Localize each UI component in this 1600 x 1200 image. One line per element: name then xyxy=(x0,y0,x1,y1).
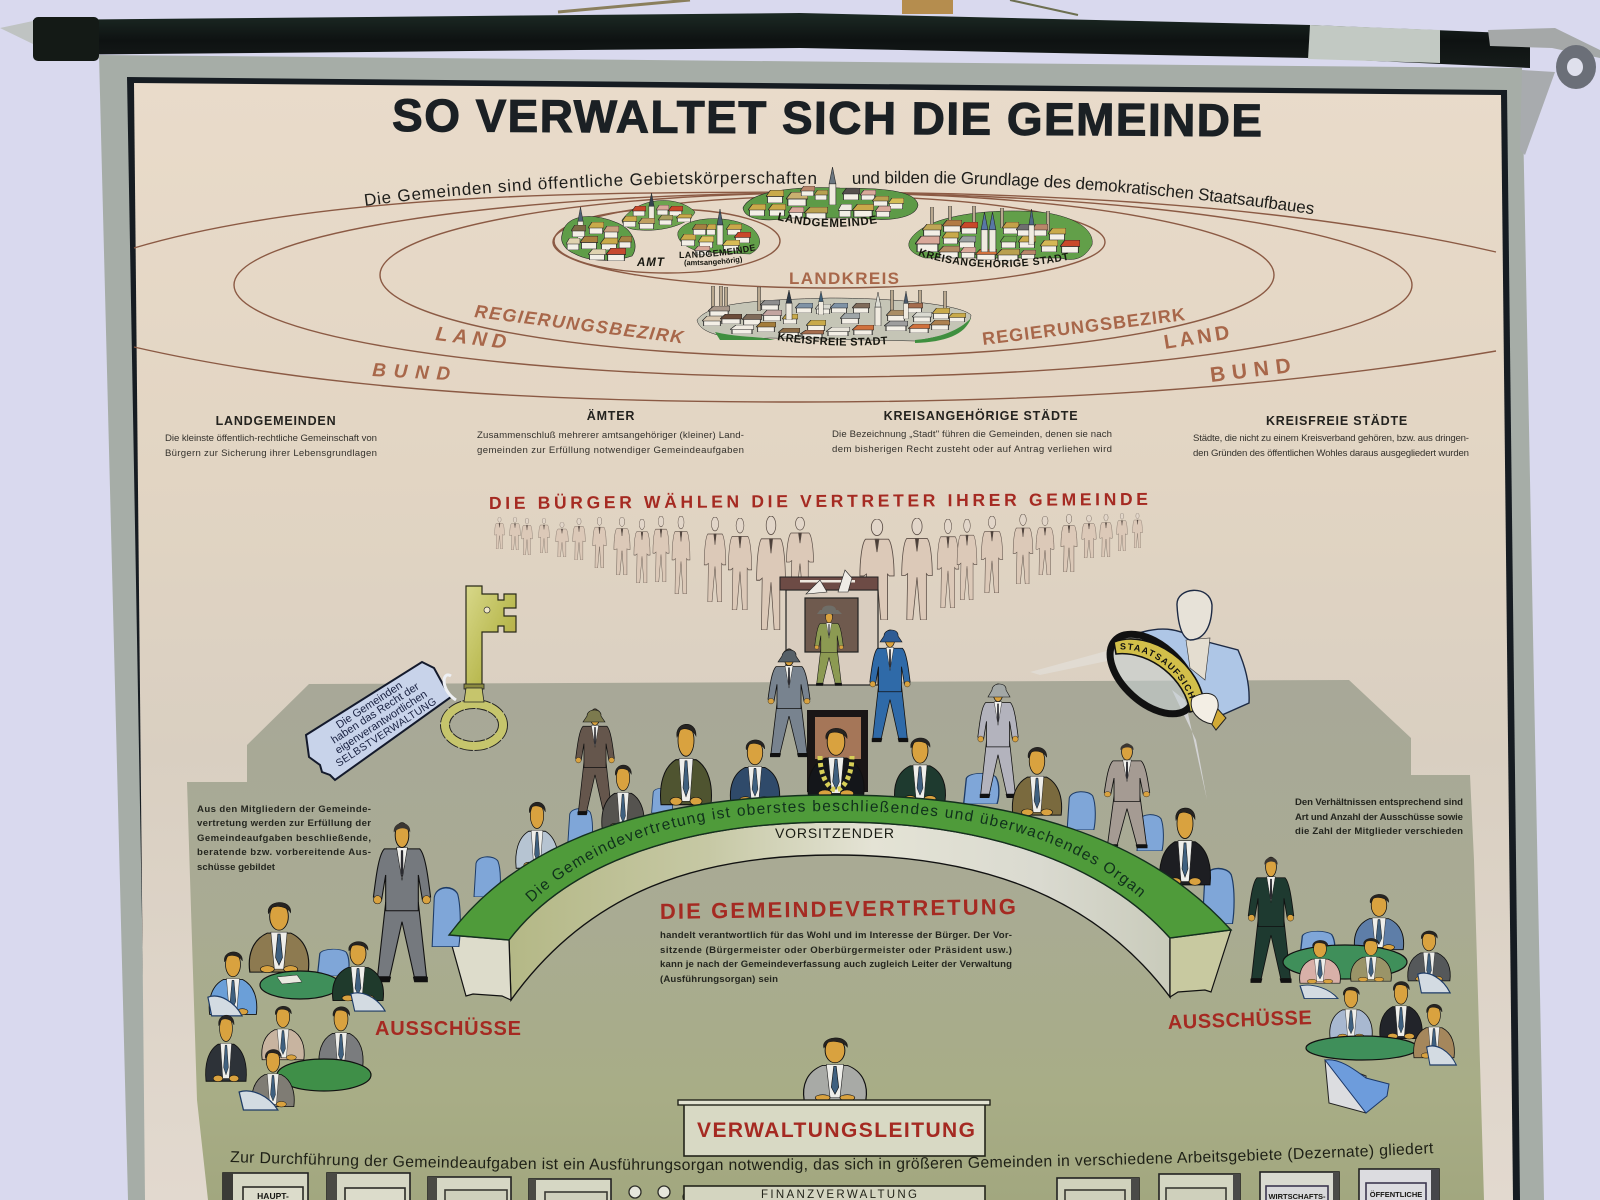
tag: Selbstverwaltung xyxy=(306,662,456,780)
text block: Ämter xyxy=(477,408,744,456)
text block: Kreisfreie Städte: KREISFREIE STÄDTE xyxy=(1266,413,1408,428)
text block: council description xyxy=(660,930,1012,985)
text block: council description: sitzende (Bürgermeister oder Oberbürgermeister oder Präsident usw.) xyxy=(660,945,1012,956)
text block: right note on committees xyxy=(1295,797,1463,837)
text block: Ämter: ÄMTER xyxy=(587,408,635,423)
town labels: AMT xyxy=(636,257,665,269)
labels: administrative levels: BUND xyxy=(1209,354,1292,387)
town labels: KREISFREIE STADT xyxy=(778,332,888,346)
text block: council description: kann je nach der Gemeindeverfassung auch zugleich Leiter der Verwaltung xyxy=(660,959,1012,970)
text block: Kreisangehörige Städte xyxy=(832,408,1112,455)
desk: Verwaltungsleitung: VERWALTUNGSLEITUNG xyxy=(697,1119,975,1142)
roller bar with end fittings xyxy=(0,13,1600,155)
labels: administrative levels: REGIERUNGSBEZIRK xyxy=(981,304,1186,349)
label: Vorsitzender: VORSITZENDER xyxy=(775,825,894,841)
text block: Landgemeinden: LANDGEMEINDEN xyxy=(216,414,336,428)
label: Ausschüsse left: AUSSCHÜSSE xyxy=(375,1017,521,1040)
town: Kreisfreie Stadt xyxy=(697,286,971,343)
people standing behind council xyxy=(576,630,1150,848)
walking man left xyxy=(373,823,431,982)
town labels: (amtsangehörig) xyxy=(684,256,742,267)
department boxes right: ÖFFENTLICHE xyxy=(1370,1190,1422,1199)
labels: administrative levels: LAND xyxy=(1162,322,1231,354)
text block: council description: handelt verantwortlich für das Wohl und im Interesse der Bürger. Der Vor- xyxy=(660,930,1012,941)
green table top with inscription: Die Gemeindevertretung ist oberstes beschließendes und überwachendes Organ xyxy=(525,800,1144,902)
key icon xyxy=(445,586,516,746)
coins icon xyxy=(629,1186,693,1200)
town labels: KREISANGEHÖRIGE STADT xyxy=(918,248,1068,268)
town: village top xyxy=(622,193,695,230)
text block: left note on committees: vertretung werden zur Erfüllung der xyxy=(197,818,371,829)
text block: left note on committees: Gemeindeaufgaben beschließende, xyxy=(197,833,371,844)
heading: citizens elect: DIE BÜRGER WÄHLEN DIE VERTRETER IHRER GEMEINDE xyxy=(489,489,1148,513)
tag: Selbstverwaltung: SELBSTVERWALTUNG xyxy=(334,695,439,770)
hanging strings and stick xyxy=(558,0,1078,15)
text block: Kreisangehörige Städte: Die Bezeichnung „Stadt" führen die Gemeinden, denen sie nach xyxy=(832,429,1112,440)
text block: Kreisfreie Städte xyxy=(1193,413,1469,459)
text block: Ämter: gemeinden zur Erfüllung notwendiger Gemeindeaufgaben xyxy=(477,445,744,456)
text block: Kreisangehörige Städte: KREISANGEHÖRIGE STÄDTE xyxy=(884,408,1078,423)
text block: left note on committees: Aus den Mitgliedern der Gemeinde- xyxy=(197,804,371,815)
text block: Landgemeinden xyxy=(165,414,377,459)
text block: Kreisfreie Städte: Städte, die nicht zu einem Kreisverband gehören, bzw. aus dringen- xyxy=(1193,433,1469,444)
figure: state supervisor with magnifying glass xyxy=(1031,590,1250,798)
town: Landgemeinde centre xyxy=(743,167,918,220)
town labels: LANDGEMEINDE xyxy=(778,212,877,227)
label: Ausschüsse right: AUSSCHÜSSE xyxy=(1167,1006,1312,1034)
text block: Kreisfreie Städte: den Gründen des öffentlichen Wohles daraus ausgegliedert wurden xyxy=(1193,448,1469,459)
title: SO VERWALTET SICH DIE GEMEINDE xyxy=(392,89,1262,146)
text block: Landgemeinden: Die kleinste öffentlich-rechtliche Gemeinschaft von xyxy=(165,433,377,444)
text block: council description: (Ausführungsorgan) sein xyxy=(660,974,778,985)
town: Amt village left xyxy=(562,207,635,261)
box: Finanzverwaltung xyxy=(684,1186,985,1200)
text block: right note on committees: Art und Anzahl der Ausschüsse sowie xyxy=(1295,812,1463,823)
voters queue xyxy=(495,513,1142,630)
text block: left note on committees: beratende bzw. vorbereitende Aus- xyxy=(197,847,371,858)
administration head figure xyxy=(804,1038,866,1101)
town: Landgemeinde within Amt xyxy=(678,209,760,255)
diagram: nested administrative ellipses xyxy=(134,192,1496,402)
figure: state supervisor with magnifying glass: STAATSAUFSICHT xyxy=(1120,643,1196,698)
heading: Die Gemeindevertretung: DIE GEMEINDEVERTRETUNG xyxy=(660,894,1016,924)
town: Kreisangehörige Stadt xyxy=(909,206,1092,261)
subtitle left part: Die Gemeinden sind öffentliche Gebietskörperschaften xyxy=(364,171,816,206)
tag: Selbstverwaltung: eigenverantwortlichen xyxy=(333,688,430,757)
text block: Ämter: Zusammenschluß mehrerer amtsangehöriger (kleiner) Land- xyxy=(477,430,744,441)
labels: administrative levels: LANDKREIS xyxy=(789,269,899,288)
text block: left note on committees: schüsse gebildet xyxy=(197,862,276,873)
text block: right note on committees: Den Verhältnissen entsprechend sind xyxy=(1295,797,1463,808)
text: executive organ sentence: Zur Durchführung der Gemeindeaufgaben ist ein Ausführungsorgan notwendig, das sich in größeren Gemeinden in verschiedene Arbeitsgebiete (Dezernate) gliedert xyxy=(230,1142,1434,1174)
ballot box booth xyxy=(780,570,878,686)
labels: administrative levels xyxy=(372,269,1292,387)
committees group left xyxy=(206,902,385,1110)
subtitle right part: und bilden die Grundlage des demokratischen Staatsaufbaues xyxy=(852,170,1314,214)
empty chair right xyxy=(1325,1060,1389,1113)
chairs behind the table xyxy=(432,773,1234,947)
labels: administrative levels: BUND xyxy=(372,360,451,385)
panel: grey-green council room xyxy=(187,680,1484,1200)
labels: administrative levels: REGIERUNGSBEZIRK xyxy=(473,301,686,348)
tag: Selbstverwaltung: Die Gemeinden xyxy=(334,680,405,731)
desk: Verwaltungsleitung xyxy=(678,1100,990,1156)
tag: Selbstverwaltung: haben das Recht der xyxy=(329,680,422,746)
text block: right note on committees: die Zahl der Mitglieder verschieden xyxy=(1295,826,1463,837)
council members seated xyxy=(516,724,1210,885)
text block: Landgemeinden: Bürgern zur Sicherung ihrer Lebensgrundlagen xyxy=(165,448,377,459)
department boxes right xyxy=(1057,1169,1439,1200)
labels: administrative levels: LAND xyxy=(434,323,508,354)
text block: Kreisangehörige Städte: dem bisherigen Recht zusteht oder auf Antrag verliehen wird xyxy=(832,444,1112,455)
mayor throne xyxy=(807,710,868,792)
green table top with inscription xyxy=(448,794,1232,941)
town labels xyxy=(636,212,1068,346)
panel: council table xyxy=(449,822,1231,1000)
department boxes left xyxy=(223,1173,611,1200)
town labels: LANDGEMEINDE xyxy=(680,244,756,258)
committees group right xyxy=(1248,857,1456,1065)
text block: left note on committees xyxy=(197,804,371,873)
